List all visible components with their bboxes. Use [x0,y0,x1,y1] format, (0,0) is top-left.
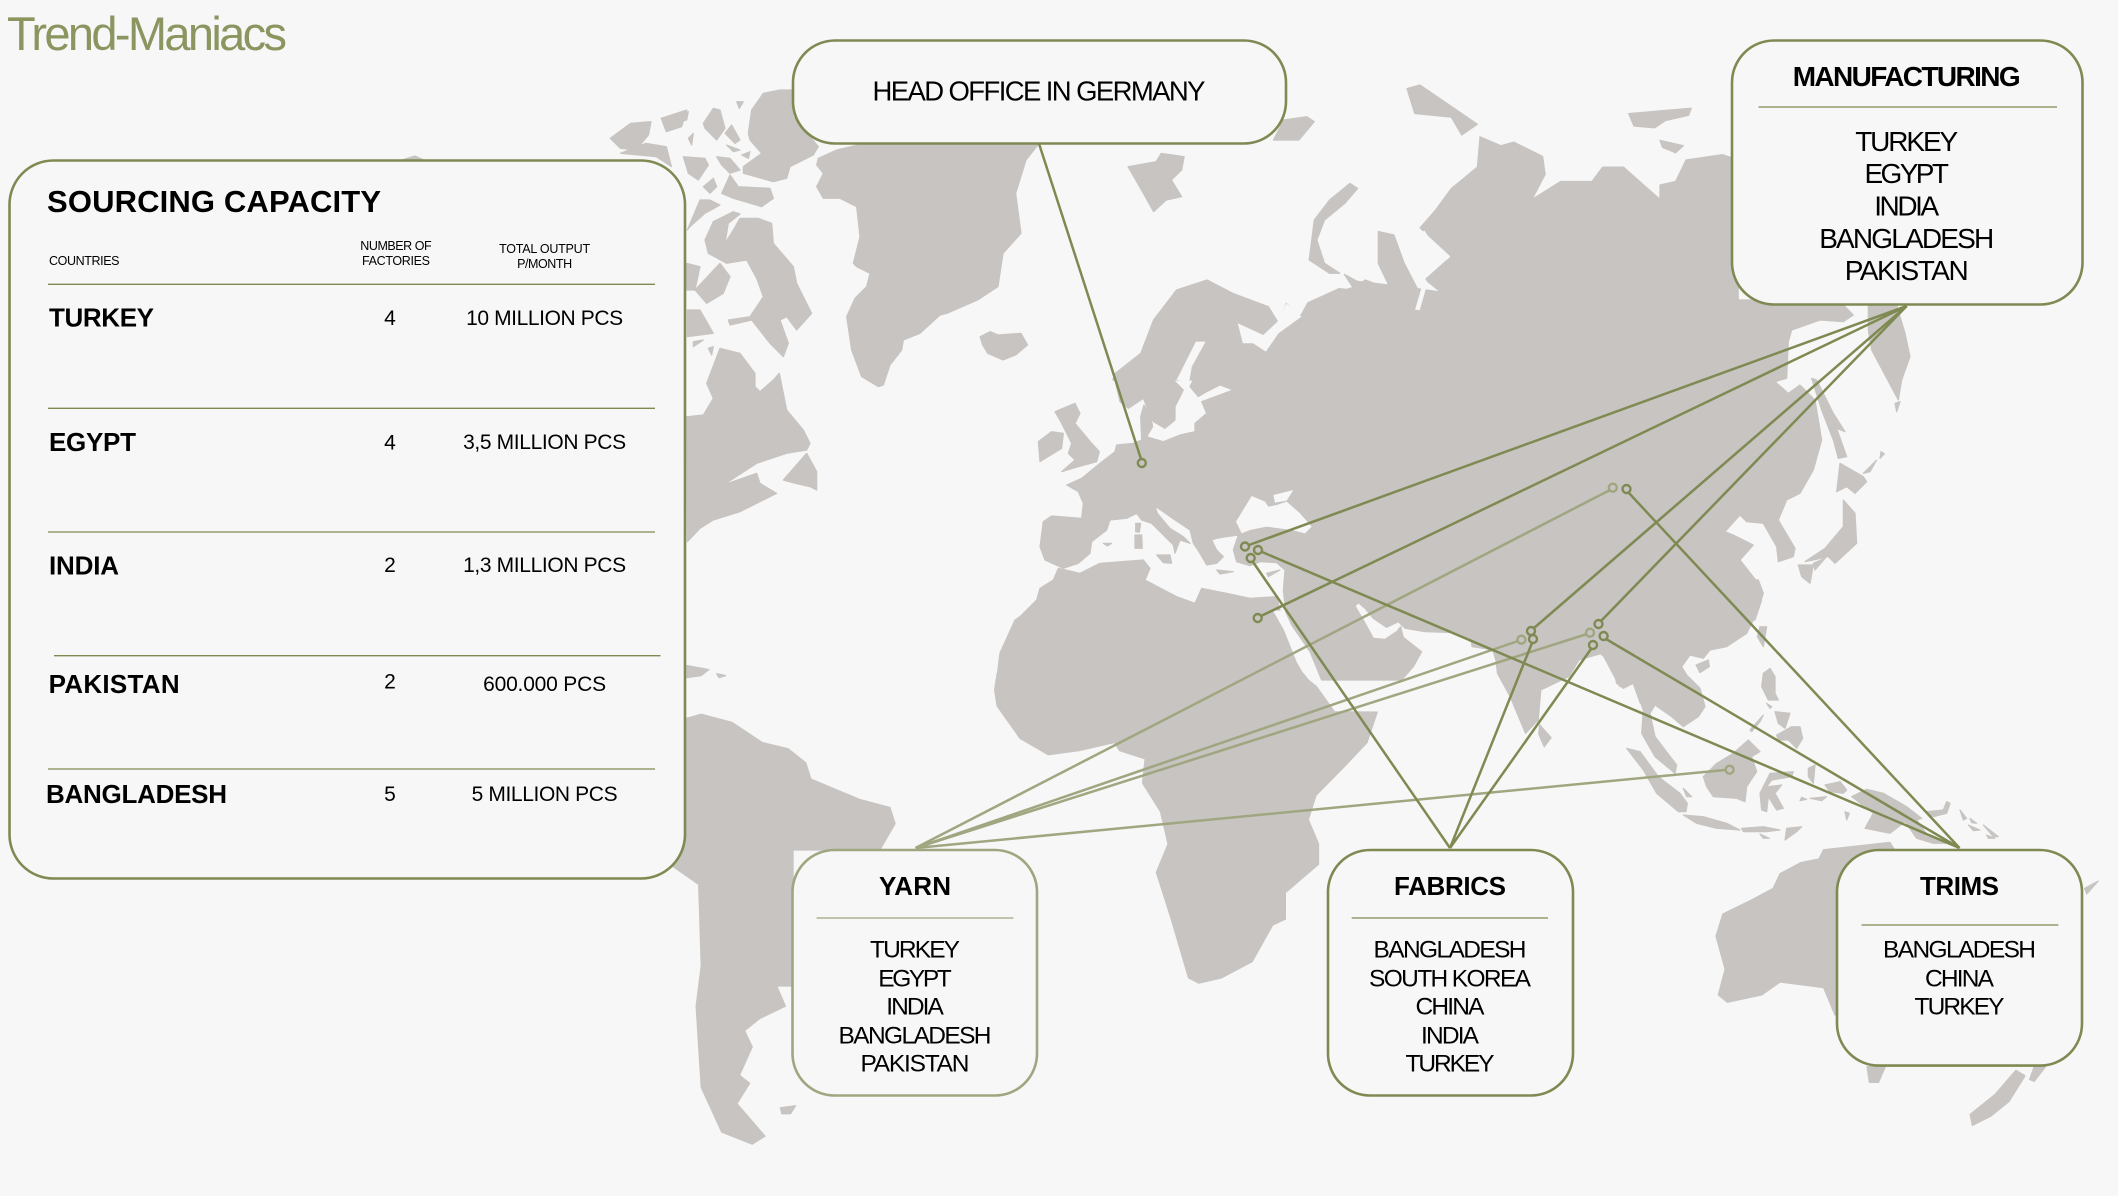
row: Egypt [49,427,626,457]
table header: NUMBER OF [360,239,432,253]
connectors: trims [1262,492,1960,848]
panel: manufacturing [1732,40,2082,304]
row: India: INDIA [49,550,119,580]
country list: SOUTH KOREA [1369,966,1532,992]
row: India: 2 [384,554,396,577]
table header: COUNTRIES [49,254,120,268]
world map [402,85,2098,1144]
connectors: manufacturing [1249,306,1907,628]
table header: FACTORIES [362,254,430,268]
row: Bangladesh: BANGLADESH [46,779,227,809]
country list: TURKEY [870,936,960,964]
table header: TOTAL OUTPUT [499,242,590,256]
heading: SOURCING CAPACITY [47,184,381,219]
row: Bangladesh [46,779,618,809]
connector: head office to Germany [1039,143,1141,459]
country list: CHINA [1416,994,1485,1020]
panel: sourcing capacity [10,160,685,878]
row: Bangladesh: 5 MILLION PCS [472,783,618,806]
row: Pakistan: PAKISTAN [49,669,180,699]
country list: EGYPT [878,966,952,992]
title: Trend-Maniacs [7,7,287,60]
country list: BANGLADESH [1819,223,1994,254]
row: Turkey [49,303,623,333]
heading: YARN [879,871,951,901]
country list: PAKISTAN [1845,255,1969,286]
panel: fabrics [1328,850,1573,1096]
row: India: 1,3 MILLION PCS [463,554,626,577]
row: Egypt: 3,5 MILLION PCS [463,431,626,454]
country list: BANGLADESH [1883,936,2036,964]
country list [1883,936,2036,1020]
panel: head office [793,40,1286,144]
panel: trims [1837,850,2082,1066]
country list [838,936,992,1078]
table header: P/MONTH [517,257,572,271]
location markers [1138,459,1630,649]
panel: yarn [792,850,1037,1096]
country list: CHINA [1925,966,1995,992]
heading: MANUFACTURING [1793,61,2021,92]
panel: head office: HEAD OFFICE IN GERMANY [872,76,1206,107]
row: Egypt: 4 [384,432,396,454]
row: Bangladesh: 5 [384,783,396,806]
table header [49,239,590,271]
connectors: yarn [916,490,1725,848]
row: Turkey: 10 MILLION PCS [466,307,623,330]
country list: BANGLADESH [838,1022,992,1050]
country list: INDIA [1874,190,1940,222]
country list: BANGLADESH [1374,936,1526,964]
location markers: yarn [1517,484,1734,774]
row: Pakistan [49,669,606,699]
country list: INDIA [886,994,944,1020]
heading: FABRICS [1394,871,1506,901]
connectors: fabrics [1253,562,1591,848]
heading: TRIMS [1920,871,1999,901]
row: Turkey: TURKEY [49,303,154,333]
country list: TURKEY [1914,994,2004,1020]
country list: TURKEY [1855,126,1959,157]
country list: INDIA [1421,1022,1480,1050]
country list: EGYPT [1864,158,1949,189]
row: India [49,550,626,580]
row: Pakistan: 600.000 PCS [483,673,606,696]
row: Pakistan: 2 [384,670,396,694]
row: Egypt: EGYPT [49,427,136,457]
row: Turkey: 4 [384,307,396,330]
country list [1819,126,1994,286]
country list [1369,936,1532,1078]
country list: TURKEY [1406,1050,1494,1078]
country list: PAKISTAN [860,1050,970,1078]
